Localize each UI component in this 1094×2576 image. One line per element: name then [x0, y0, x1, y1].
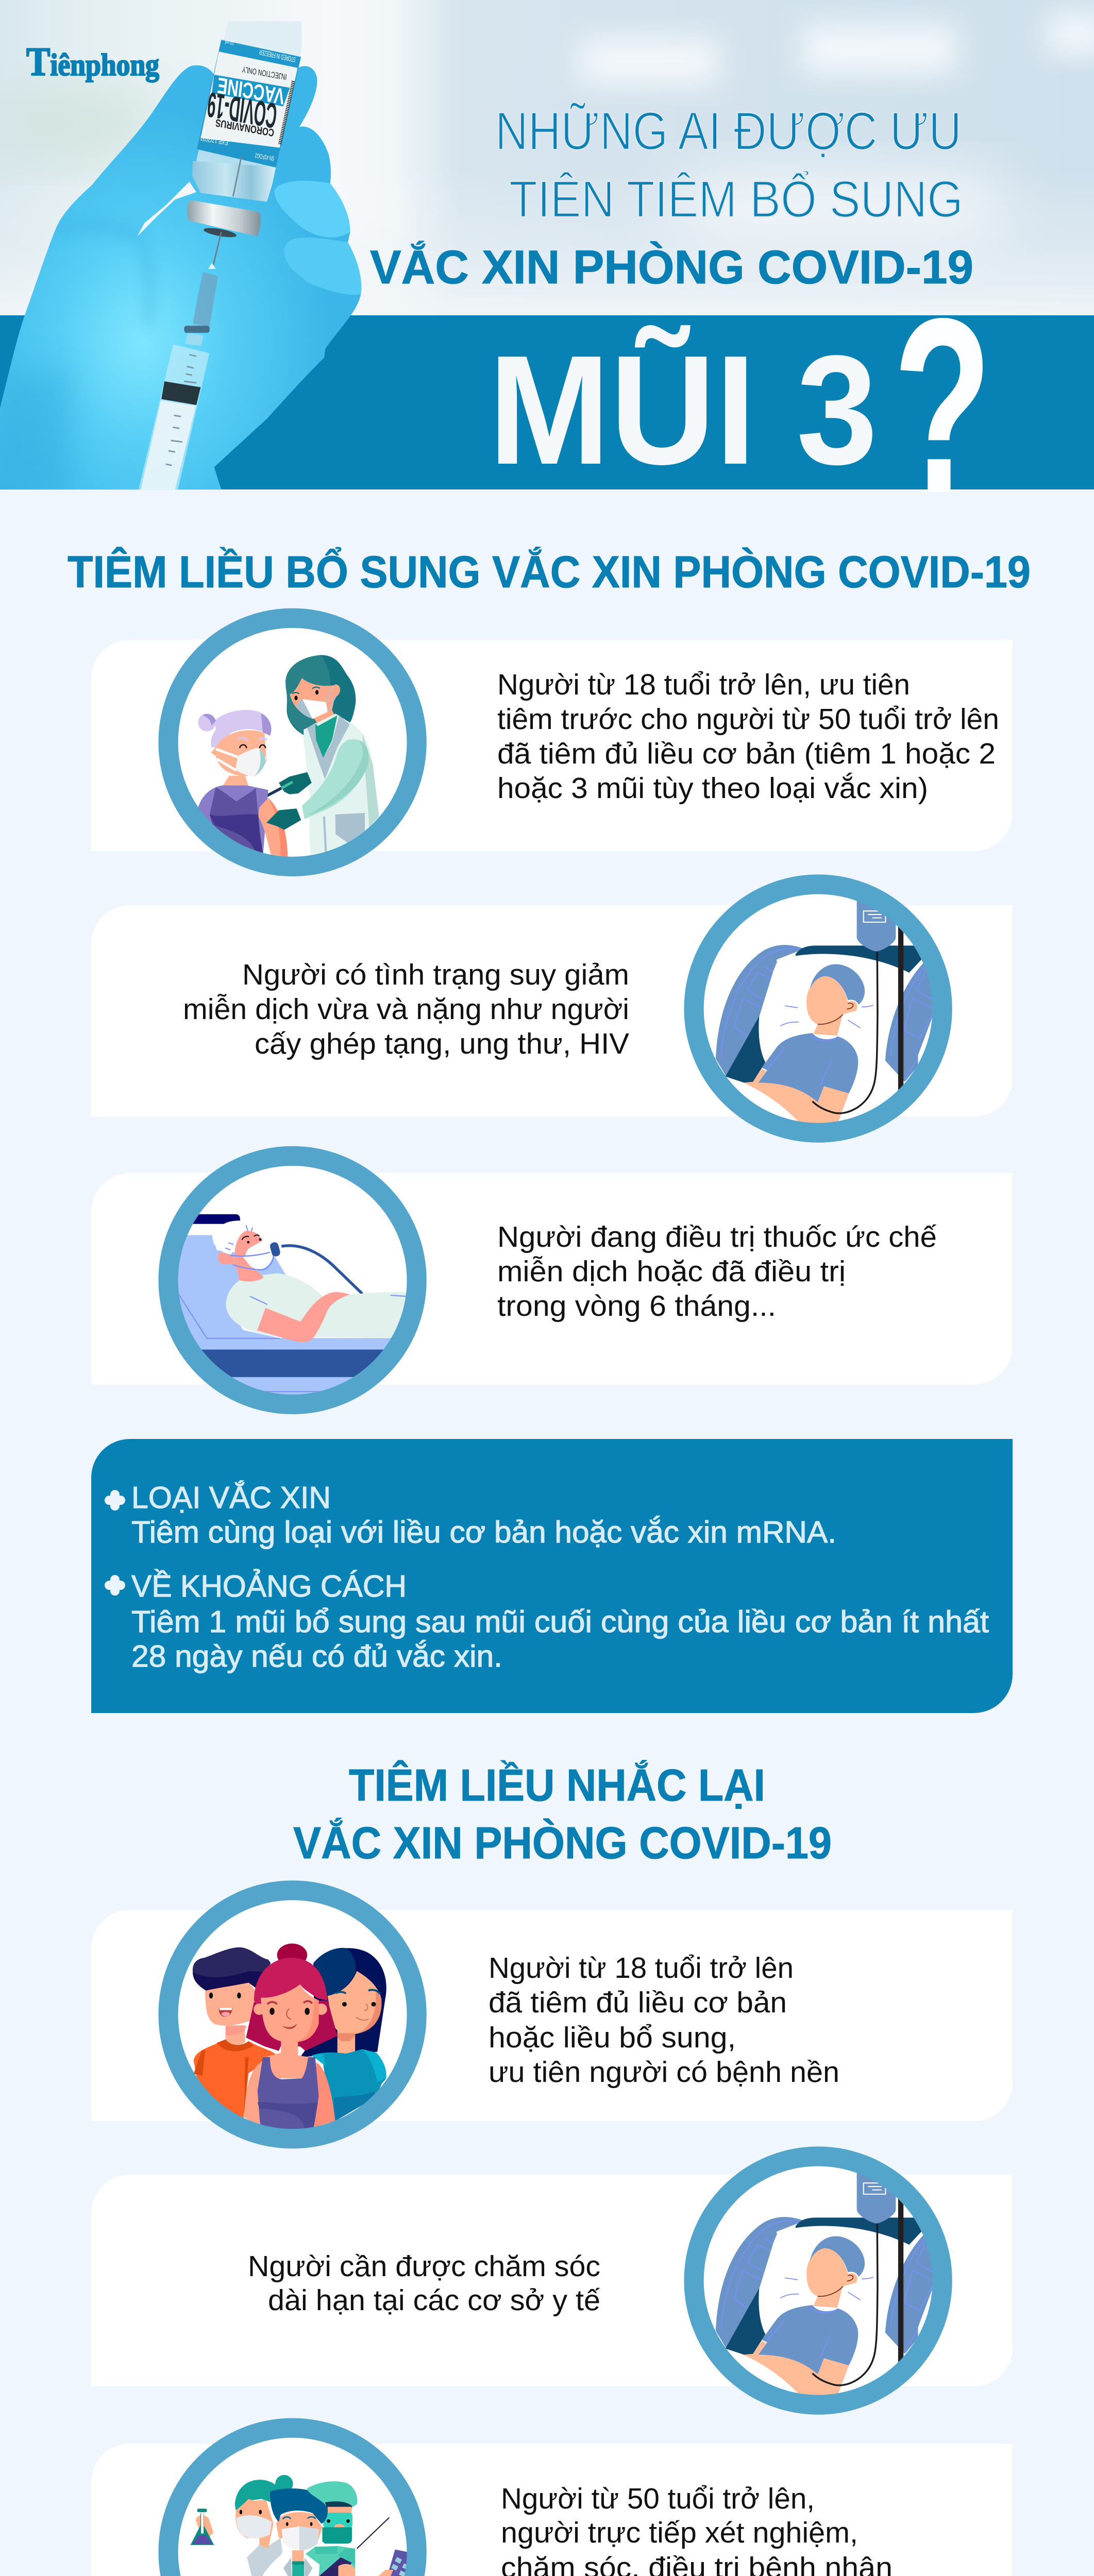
hand holding vaccine vial and syringe: [0, 21, 362, 489]
card 3 text: miễn dịch hoặc đã điều trị: [497, 1255, 846, 1288]
panel: card 1: [91, 618, 1013, 867]
text: interval: 28 ngày nếu có đủ vắc xin.: [131, 1639, 502, 1673]
big question mark: ?: [893, 266, 992, 545]
illustration: patient on a bed with oxygen mask: [158, 1146, 427, 1414]
illustration: nurse vaccinating elderly woman: [158, 608, 427, 876]
title line 3: VẮC XIN PHÒNG COVID-19: [370, 241, 973, 294]
text: vaccine type: Tiêm cùng loại với liều cơ bản hoặc vắc xin mRNA.: [131, 1515, 836, 1549]
panel: card 4: [91, 1890, 1013, 2139]
card 4 text: ưu tiên người có bệnh nền: [489, 2056, 839, 2089]
vial label text: STORED IN FREEZER: [259, 48, 296, 64]
card 4 text: Người từ 18 tuổi trở lên: [489, 1952, 794, 1985]
card 2 text: miễn dịch vừa và nặng như người: [183, 993, 629, 1026]
title big dose text: MŨI 3: [489, 323, 878, 497]
heading: repeat dose: [293, 1760, 832, 1868]
card 6 text: [501, 2482, 893, 2576]
plus icon: [109, 1580, 121, 1591]
vial label text: INJECTION ONLY: [242, 64, 287, 81]
panel: card 2: [91, 885, 1013, 1133]
card 3 text: Người đang điều trị thuốc ức chế: [497, 1221, 937, 1253]
vial label text: EXP 12/2031: [199, 134, 228, 146]
card 4 text: [489, 1952, 839, 2089]
vial label text: [199, 38, 296, 162]
card 3 text: [497, 1221, 937, 1323]
header blue band: [0, 315, 1094, 489]
text: vaccine type: LOẠI VẮC XIN: [131, 1480, 331, 1515]
illustration: three adults: [158, 1880, 427, 2148]
vial label text: CORONAVIRUS: [215, 117, 275, 139]
text: interval: [131, 1569, 989, 1673]
card 5 text: Người cần được chăm sóc: [248, 2250, 600, 2283]
illustration: immunocompromised patient with IV: [684, 874, 952, 1143]
card 3 text: trong vòng 6 tháng...: [497, 1290, 776, 1323]
panel: card 5: [91, 2157, 1013, 2405]
vial label text: COVID-19: [206, 84, 279, 135]
text: interval: VỀ KHOẢNG CÁCH: [131, 1569, 407, 1603]
card 1 text: [497, 668, 999, 805]
panel: card 3: [91, 1156, 1013, 1404]
card 4 text: đã tiêm đủ liều cơ bản: [489, 1986, 787, 2019]
card 5 text: [248, 2250, 600, 2317]
title line 2: TIÊN TIÊM BỔ SUNG: [509, 171, 963, 228]
heading: booster dose: TIÊM LIỀU BỔ SUNG VẮC XIN PHÒNG COVID-19: [68, 547, 1031, 597]
header photo background: [0, 0, 1094, 319]
heading: repeat dose: TIÊM LIỀU NHẮC LẠI: [349, 1760, 765, 1810]
syringe: [139, 232, 221, 489]
card 4 text: hoặc liều bổ sung,: [489, 2021, 736, 2054]
vial label text: VACCINE: [216, 72, 285, 109]
card 2 text: cấy ghép tạng, ung thư, HIV: [255, 1027, 629, 1060]
panel: vaccine type and interval for booster dose: [91, 1439, 1013, 1713]
card 2 text: Người có tình trạng suy giảm: [242, 958, 629, 991]
card 6 text: người trực tiếp xét nghiệm,: [501, 2516, 858, 2549]
glove: [0, 65, 361, 495]
card 2 text: [183, 958, 629, 1060]
card 1 text: Người từ 18 tuổi trở lên, ưu tiên: [497, 668, 910, 701]
logo: Tiền Phong: Tiênphong: [26, 39, 159, 84]
panel: card 6: [91, 2428, 1013, 2576]
plus icon: [109, 1495, 121, 1506]
title line 1: NHỮNG AI ĐƯỢC ƯU: [495, 101, 962, 161]
title: [370, 101, 992, 545]
illustration: long-term care patient with IV: [684, 2146, 952, 2415]
text: interval: Tiêm 1 mũi bổ sung sau mũi cuối cùng của liều cơ bản ít nhất: [131, 1605, 989, 1639]
heading: repeat dose: VẮC XIN PHÒNG COVID-19: [293, 1818, 832, 1868]
card 1 text: đã tiêm đủ liều cơ bản (tiêm 1 hoặc 2: [497, 737, 996, 770]
card 1 text: tiêm trước cho người từ 50 tuổi trở lên: [497, 703, 999, 736]
text: vaccine type: [131, 1480, 836, 1549]
gap between thumb and palm: [137, 182, 196, 236]
card 5 text: dài hạn tại các cơ sở y tế: [268, 2284, 600, 2317]
card 1 text: hoặc 3 mũi tùy theo loại vắc xin): [497, 772, 928, 805]
illustration: medical staff team: [158, 2418, 427, 2576]
card 6 text: Người từ 50 tuổi trở lên,: [501, 2482, 815, 2515]
vaccine vial: [187, 21, 301, 239]
vial label text: 10 ml: [225, 38, 234, 46]
aluminium cap: [187, 200, 261, 236]
vial label text: SN 41FOG2: [255, 151, 275, 162]
